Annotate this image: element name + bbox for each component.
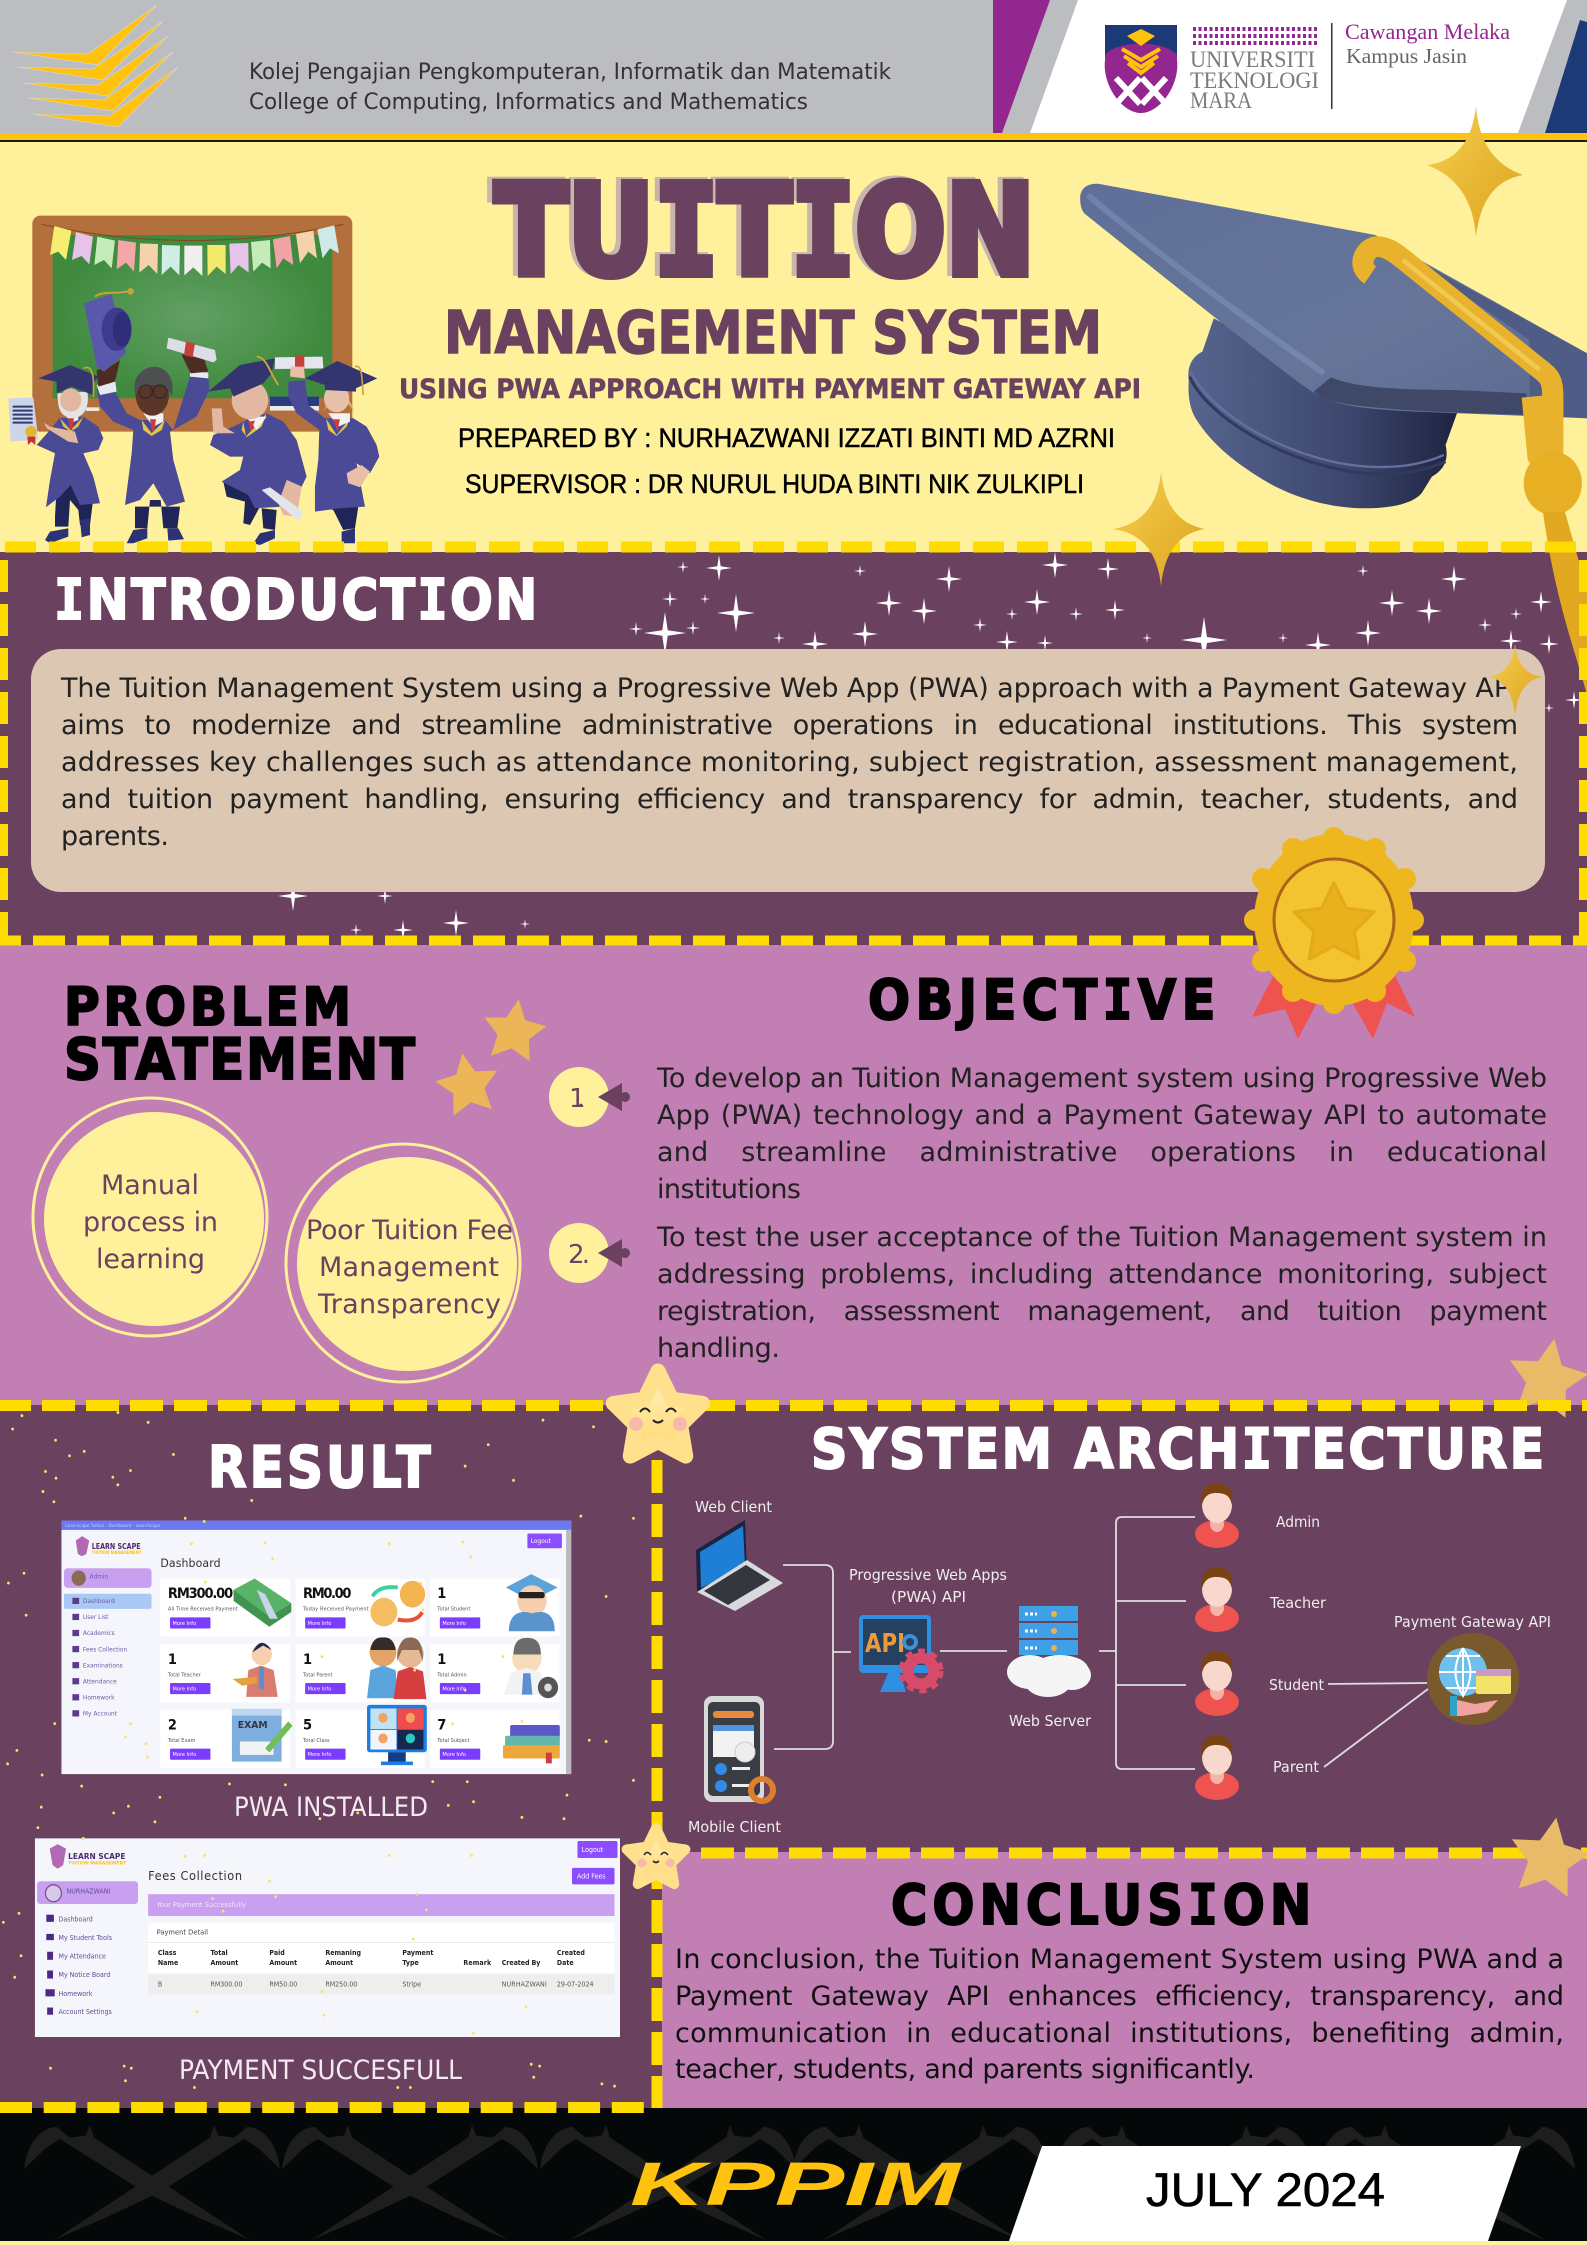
objective 2: handling. xyxy=(657,1333,780,1364)
UiTM logo: MARA xyxy=(1190,88,1252,113)
tassel fringe xyxy=(1543,512,1587,695)
stat cards: More Info xyxy=(308,1686,331,1693)
introduction text box xyxy=(31,649,1545,892)
payment table: Payment xyxy=(402,1949,433,1957)
heading: conclusion: CONCLUSION xyxy=(891,1874,1311,1938)
logout button xyxy=(527,1533,562,1548)
mobile client xyxy=(688,1696,781,1836)
icon: medal xyxy=(1244,827,1424,1039)
payment table: Created By xyxy=(502,1959,541,1967)
stat cards: Total Admin xyxy=(436,1672,467,1678)
introduction text box: and tuition payment handling, ensuring efficiency and transparency for admin, teacher, students, and xyxy=(61,784,1518,815)
parent user: Parent xyxy=(1273,1758,1319,1776)
chalkboard xyxy=(32,216,352,432)
screenshot: dashboard: Learnscape Tuition - Dashboard - LearnScape xyxy=(65,1523,160,1529)
web client: Web Client xyxy=(695,1498,772,1516)
introduction text box: addresses key challenges such as attendance monitoring, subject registration, assessment management, xyxy=(61,747,1518,778)
dashed border: intro bottom xyxy=(0,936,1587,946)
stat cards: 2 xyxy=(168,1718,177,1734)
PWA API xyxy=(849,1566,1007,1692)
sidebar menu: Homework xyxy=(83,1694,115,1702)
payment table: 29-07-2024 xyxy=(557,1980,594,1989)
UiTM logo: TEKNOLOGI xyxy=(1190,68,1319,93)
app logo xyxy=(50,1844,126,1869)
graduate 4 holding diploma xyxy=(275,355,379,543)
footer band xyxy=(0,2108,1587,2241)
circle: poor tuition fee: Poor Tuition Fee xyxy=(306,1215,513,1246)
sidebar menu: Attendance xyxy=(83,1678,117,1686)
payment table: Name xyxy=(158,1959,179,1967)
teacher user xyxy=(1195,1567,1327,1632)
stat cards: Total Subject xyxy=(436,1738,469,1744)
payment table xyxy=(148,1923,615,1995)
PWA API: API xyxy=(865,1629,905,1659)
circle: manual process: process in xyxy=(83,1207,218,1238)
heading: introduction: INTRODUCTION xyxy=(54,567,537,633)
icon: gold sparkle on intro box xyxy=(1488,644,1543,717)
heading: problem statement: STATEMENT xyxy=(64,1026,415,1093)
success alert: Your Payment Successfully xyxy=(156,1901,246,1909)
screenshot: dashboard xyxy=(61,1521,571,1774)
circle: poor tuition fee xyxy=(286,1144,520,1382)
mobile client: Mobile Client xyxy=(688,1818,781,1836)
icon: kawaii star large xyxy=(613,1371,703,1456)
stat cards: RM300.00 xyxy=(168,1587,233,1602)
header band xyxy=(0,0,1587,142)
teacher user: Teacher xyxy=(1269,1594,1327,1612)
card icons xyxy=(232,1574,560,1765)
sidebar menu: Academics xyxy=(83,1630,115,1637)
stat cards: All Time Received Payment xyxy=(168,1607,238,1613)
payment gateway icon: Payment Gateway API xyxy=(1394,1613,1551,1631)
label: PWA installed: PWA INSTALLED xyxy=(234,1792,428,1823)
architecture diagram xyxy=(688,1483,1551,1836)
conclusion text: Payment Gateway API enhances efficiency, transparency, and xyxy=(675,1981,1564,2012)
circle: poor tuition fee: Management xyxy=(319,1252,499,1283)
heading: system architecture: SYSTEM ARCHITECTURE xyxy=(811,1418,1544,1482)
panel: introduction xyxy=(0,552,1587,945)
sidebar menu xyxy=(64,1568,152,1718)
UiTM logo xyxy=(1105,19,1510,113)
prepared by: PREPARED BY : NURHAZWANI IZZATI BINTI MD AZRNI xyxy=(458,423,1115,453)
objective 2: registration, assessment management, and tuition payment xyxy=(657,1296,1547,1327)
student user: Student xyxy=(1269,1676,1324,1694)
web server: Web Server xyxy=(1009,1712,1092,1730)
label: payment successful: PAYMENT SUCCESFULL xyxy=(179,2055,462,2086)
circle: manual process xyxy=(33,1098,267,1336)
payment table: Payment Detail xyxy=(157,1928,208,1936)
icon: yellow chevrons logo xyxy=(12,5,178,127)
circle: poor tuition fee: Transparency xyxy=(317,1289,501,1320)
conclusion text xyxy=(675,1944,1564,2085)
objective 2: 2. xyxy=(568,1240,590,1270)
payment table: Remaning xyxy=(325,1949,361,1957)
success alert xyxy=(148,1894,615,1916)
web client xyxy=(695,1498,783,1611)
icon: kawaii star small xyxy=(627,1828,685,1884)
subtitle: using PWA approach: USING PWA APPROACH WITH PAYMENT GATEWAY API xyxy=(399,374,1141,405)
panel: problem and objective xyxy=(0,945,1587,1405)
stat cards: Total Teacher xyxy=(167,1672,202,1678)
app logo: TUITION MANAGEMENT xyxy=(92,1550,142,1555)
illustration: graduation cap xyxy=(1080,184,1587,515)
icon: orange stars xyxy=(431,995,550,1118)
panel: result background xyxy=(0,1405,1587,2108)
sidebar menu: NURHAZWANI xyxy=(67,1887,110,1895)
sidebar menu: Dashboard xyxy=(83,1598,115,1605)
objective 1: and streamline administrative operations in educational xyxy=(657,1137,1547,1168)
hand-drawn star upper conclusion xyxy=(1504,1811,1587,1899)
parent user xyxy=(1195,1735,1319,1800)
logout button: Logout xyxy=(531,1538,551,1545)
fees title: Fees Collection xyxy=(148,1869,242,1883)
stat cards: More Info xyxy=(442,1686,466,1693)
stat cards: More Info xyxy=(173,1621,196,1627)
faculty name text: Kolej Pengajian Pengkomputeran, Informatik dan Matematik xyxy=(249,60,891,85)
sidebar menu: My Attendance xyxy=(59,1952,106,1961)
payment table: Amount xyxy=(269,1959,297,1967)
graduate 3 jumping with scroll xyxy=(208,357,307,545)
PWA API: Progressive Web Apps xyxy=(849,1566,1007,1584)
date panel xyxy=(1009,2146,1521,2241)
buttons xyxy=(572,1841,617,1884)
payment gateway icon xyxy=(1394,1613,1551,1725)
stat cards: 1 xyxy=(168,1653,177,1668)
payment table: Amount xyxy=(210,1959,238,1967)
payment table: RM300.00 xyxy=(210,1980,242,1989)
stat cards: Total Class xyxy=(302,1738,330,1744)
heading: problem statement xyxy=(64,977,415,1093)
objective 1: App (PWA) technology and a Payment Gateway API to automate xyxy=(657,1100,1547,1131)
payment table: RM250.00 xyxy=(325,1980,357,1989)
payment table: Created xyxy=(557,1949,585,1957)
stat cards: 1 xyxy=(303,1653,312,1668)
PWA API: (PWA) API xyxy=(891,1588,966,1606)
introduction text box: parents. xyxy=(61,821,169,852)
illustration: chalkboard and graduates xyxy=(8,216,379,545)
dashboard title: Dashboard xyxy=(160,1557,221,1570)
payment table: Amount xyxy=(325,1959,353,1967)
hand-drawn star right xyxy=(1502,1332,1587,1420)
objective 1: 1. xyxy=(569,1084,586,1114)
stat cards: More Info xyxy=(308,1752,331,1758)
sidebar menu: Examinations xyxy=(83,1662,123,1669)
sidebar menu: My Notice Board xyxy=(59,1971,110,1979)
sidebar menu: User List xyxy=(83,1614,109,1621)
stat cards: 5 xyxy=(303,1718,312,1734)
payment table: Class xyxy=(158,1949,177,1957)
stat cards: More Info xyxy=(173,1686,196,1693)
card icons: EXAM xyxy=(238,1720,268,1731)
payment table: Total xyxy=(210,1949,228,1957)
sidebar menu: Homework xyxy=(59,1990,93,1998)
date panel: JULY 2024 xyxy=(1146,2163,1385,2216)
stat cards: More Info xyxy=(442,1752,466,1758)
admin user: Admin xyxy=(1276,1513,1320,1531)
payment table: Stripe xyxy=(402,1980,421,1989)
conclusion text: communication in educational institutions, benefiting admin, xyxy=(675,2018,1564,2049)
sidebar menu: My Student Tools xyxy=(59,1934,113,1942)
payment table: Remark xyxy=(463,1959,492,1967)
faculty name text: College of Computing, Informatics and Mathematics xyxy=(249,90,808,115)
buttons: Logout xyxy=(582,1846,604,1854)
sidebar menu xyxy=(37,1881,138,2016)
conclusion text: In conclusion, the Tuition Management System using PWA and a xyxy=(675,1944,1564,1975)
objective 2: To test the user acceptance of the Tuition Management system in xyxy=(656,1222,1547,1253)
buttons: Add Fees xyxy=(577,1872,606,1881)
graduate 2 holding cap up xyxy=(84,288,217,543)
heading: problem statement: PROBLEM xyxy=(64,977,351,1039)
admin user xyxy=(1195,1483,1320,1548)
dashed border: lower xyxy=(0,1406,1587,2108)
sidebar menu: My Account xyxy=(83,1710,118,1718)
heading: result: RESULT xyxy=(208,1434,431,1501)
supervisor: SUPERVISOR : DR NURUL HUDA BINTI NIK ZULKIPLI xyxy=(465,469,1084,499)
stat cards: Today Received Payment xyxy=(302,1607,369,1613)
objective 2: addressing problems, including attendance monitoring, subject xyxy=(657,1259,1547,1290)
stat cards xyxy=(160,1579,559,1768)
UiTM logo: Cawangan Melaka xyxy=(1345,19,1510,44)
stat cards: 7 xyxy=(437,1718,446,1734)
app logo: LEARN SCAPE xyxy=(92,1542,141,1551)
web server xyxy=(1007,1606,1092,1730)
payment table: NURHAZWANI xyxy=(502,1980,547,1989)
app logo xyxy=(76,1536,142,1556)
payment table: Date xyxy=(557,1959,574,1967)
stat cards: More Info xyxy=(308,1621,331,1627)
graduate 1 with certificate xyxy=(8,365,103,543)
stat cards: 1 xyxy=(437,1653,446,1668)
payment table: B xyxy=(158,1980,162,1989)
stat cards: 1 xyxy=(437,1587,446,1602)
heading: objective: OBJECTIVE xyxy=(868,969,1215,1033)
conclusion text: teacher, students, and parents significantly. xyxy=(675,2054,1255,2085)
stat cards: Total Exam xyxy=(167,1738,195,1744)
circle: manual process: learning xyxy=(96,1244,205,1275)
objective 1: institutions xyxy=(657,1174,801,1205)
icon: gold sparkle top xyxy=(1427,106,1523,237)
payment table: Type xyxy=(402,1959,419,1967)
main title: TUITION: TUITION xyxy=(495,159,1035,304)
subtitle: management system: MANAGEMENT SYSTEM xyxy=(444,298,1102,367)
icon: gold sparkle lower xyxy=(1113,472,1205,586)
sidebar menu: Admin xyxy=(90,1573,109,1581)
screenshot: payment xyxy=(35,1838,620,2037)
stat cards: More Info xyxy=(442,1621,466,1627)
objective 2 xyxy=(549,1222,1547,1364)
stat cards: Total Student xyxy=(436,1607,470,1613)
sidebar menu: Account Settings xyxy=(59,2008,112,2016)
objective 1: To develop an Tuition Management system using Progressive Web xyxy=(656,1063,1547,1094)
objective 1 xyxy=(549,1063,1547,1205)
stat cards: Total Parent xyxy=(302,1672,333,1678)
introduction text box: The Tuition Management System using a Progressive Web App (PWA) approach with a Payment Gateway API xyxy=(60,673,1518,704)
stat cards: RM0.00 xyxy=(303,1587,351,1602)
UiTM logo: UNIVERSITI xyxy=(1190,47,1315,72)
main title: TUITION: TUITION xyxy=(490,157,1030,302)
decorative yellow dots xyxy=(3,1412,636,2087)
stat cards: More Info xyxy=(173,1752,196,1758)
app logo: LEARN SCAPE xyxy=(68,1852,125,1861)
connector lines xyxy=(774,1517,1428,1769)
circle: manual process: Manual xyxy=(101,1170,199,1201)
sidebar menu: Dashboard xyxy=(59,1915,93,1923)
payment table: Paid xyxy=(269,1949,285,1957)
UiTM logo: Kampus Jasin xyxy=(1346,44,1468,68)
app logo: TUITION MANAGEMENT xyxy=(68,1861,126,1867)
dashed border: upper xyxy=(4,547,1587,936)
payment table: RM50.00 xyxy=(269,1980,297,1989)
sidebar menu: Fees Collection xyxy=(83,1646,127,1653)
student user xyxy=(1195,1651,1324,1716)
KPPIM wordmark: KPPIM xyxy=(630,2150,962,2218)
introduction text box: aims to modernize and streamline administrative operations in educational institutions. This system xyxy=(61,710,1518,741)
faculty name text xyxy=(249,60,891,115)
bunting flags xyxy=(42,224,343,276)
